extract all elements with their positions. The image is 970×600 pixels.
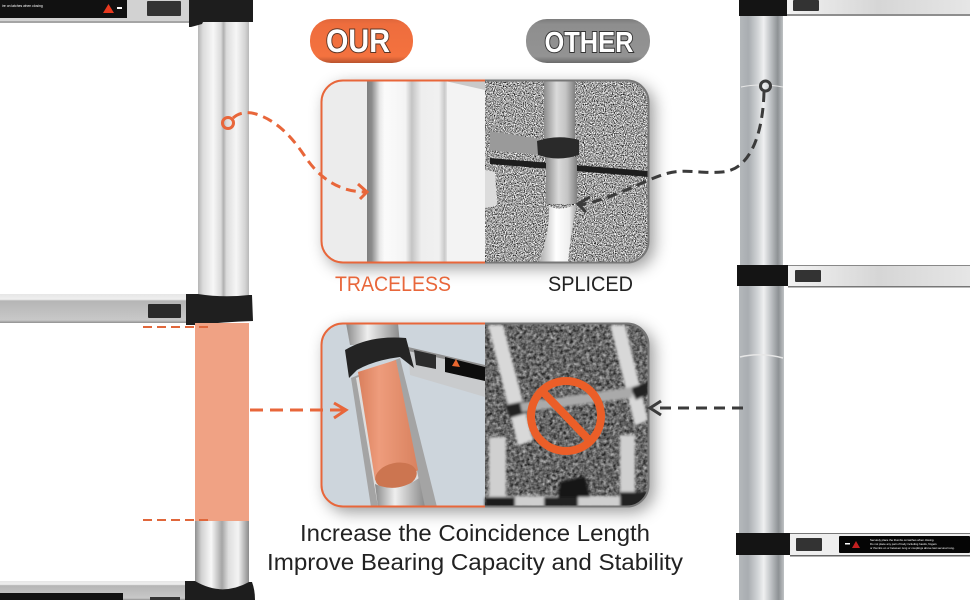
traceless tube close-up: [321, 80, 485, 263]
icon: prohibition sign: [531, 381, 601, 451]
right ladder lower rung with label: or thumbs on or between rung or couplings above last secured rung.: [870, 546, 955, 550]
spliced tube photo: [485, 80, 649, 263]
arrow: traceless pointer: [222, 113, 367, 199]
right ladder top rung: [787, 0, 970, 16]
overlap start marker: [143, 326, 212, 328]
badge: OUR: [310, 19, 413, 63]
label: TRACELESS: TRACELESS: [335, 273, 451, 296]
arrow: other overlap pointer: [650, 401, 743, 415]
arrow: overlap pointer: [250, 403, 346, 418]
right ladder lower rung with label: [790, 533, 970, 556]
badge: OUR: OUR: [326, 23, 390, 59]
caption: [267, 520, 684, 575]
left ladder top collar: [189, 0, 253, 27]
right ladder tube: [740, 14, 783, 266]
panel: overlap comparison: [321, 323, 649, 507]
badge: OTHER: OTHER: [544, 27, 634, 59]
right ladder lower rung with label: Securely place the thumbs on latches when closing.: [870, 538, 934, 542]
overlap panel left border: [322, 324, 485, 506]
right ladder lower collar: [736, 533, 790, 555]
left ladder top rung with label: ire on latches when closing: [2, 4, 43, 8]
traceless panel border: [322, 80, 485, 262]
left ladder bottom collar: [185, 581, 255, 600]
right ladder middle collar: [737, 265, 788, 286]
overlap end marker: [143, 519, 212, 521]
left ladder bottom rung with label: [0, 581, 186, 600]
badge: OTHER: [526, 19, 650, 63]
blurred ladder photo: [485, 323, 649, 507]
left ladder: ours: [0, 0, 255, 600]
panel: traceless vs spliced: [321, 80, 649, 263]
right ladder lower rung with label: Do not place any part of body including hands, fingers: [870, 542, 937, 546]
cutaway tube with copper insert: [321, 323, 485, 507]
left ladder lower tube: [195, 521, 249, 589]
left ladder upper tube: [198, 20, 249, 297]
caption: Increase the Coincidence Length: [300, 520, 650, 546]
right ladder middle rung: [788, 265, 970, 288]
left ladder top rung with label: [0, 0, 192, 23]
spliced panel border: [485, 80, 648, 262]
caption: Improve Bearing Capacity and Stability: [267, 549, 684, 575]
overlap panel right border: [485, 324, 648, 506]
right ladder: other: [736, 0, 970, 600]
left ladder middle rung: [0, 294, 188, 323]
label: SPLICED: SPLICED: [548, 273, 633, 296]
orange overlap section: [195, 323, 249, 521]
right ladder top collar: [739, 0, 787, 16]
left ladder middle collar: [186, 294, 253, 325]
right ladder splice seams: [740, 85, 783, 358]
arrow: splice pointer: [578, 81, 770, 212]
